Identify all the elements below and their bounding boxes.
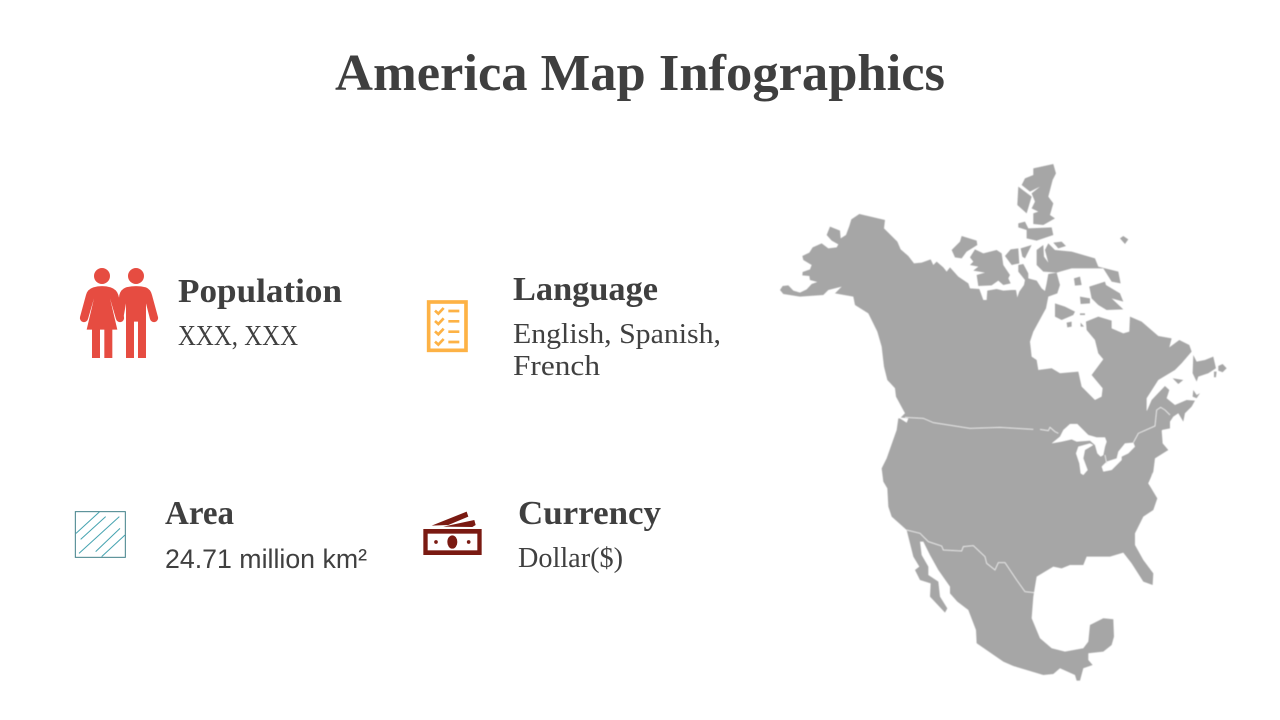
icon: couple — [80, 268, 158, 358]
panel: currency — [423, 495, 661, 574]
icon: banknotes — [423, 512, 482, 555]
title: America Map Infographics — [335, 45, 945, 102]
panel: population — [80, 268, 342, 358]
panel: language — [429, 271, 721, 382]
canada and alaska — [780, 164, 1227, 431]
panel: area — [75, 495, 367, 574]
value: currency: Dollar($) — [518, 543, 623, 574]
heading: currency: Currency — [518, 495, 661, 532]
great lakes — [1040, 407, 1170, 475]
western and mexican borders — [905, 417, 1034, 593]
heading: population: Population — [178, 273, 342, 310]
coast notches — [898, 417, 1153, 487]
heading: language: Language — [513, 271, 658, 308]
icon: hatched square — [75, 512, 125, 557]
icon: checklist — [429, 302, 466, 350]
value: language: English, Spanish, — [513, 319, 721, 350]
map: north america — [780, 164, 1227, 681]
value: population: XXX, XXX — [178, 321, 298, 352]
value: language: French — [513, 351, 600, 382]
value: area: 24.71 million km² — [165, 544, 367, 574]
heading: area: Area — [165, 495, 234, 532]
usa and mexico — [882, 410, 1170, 681]
